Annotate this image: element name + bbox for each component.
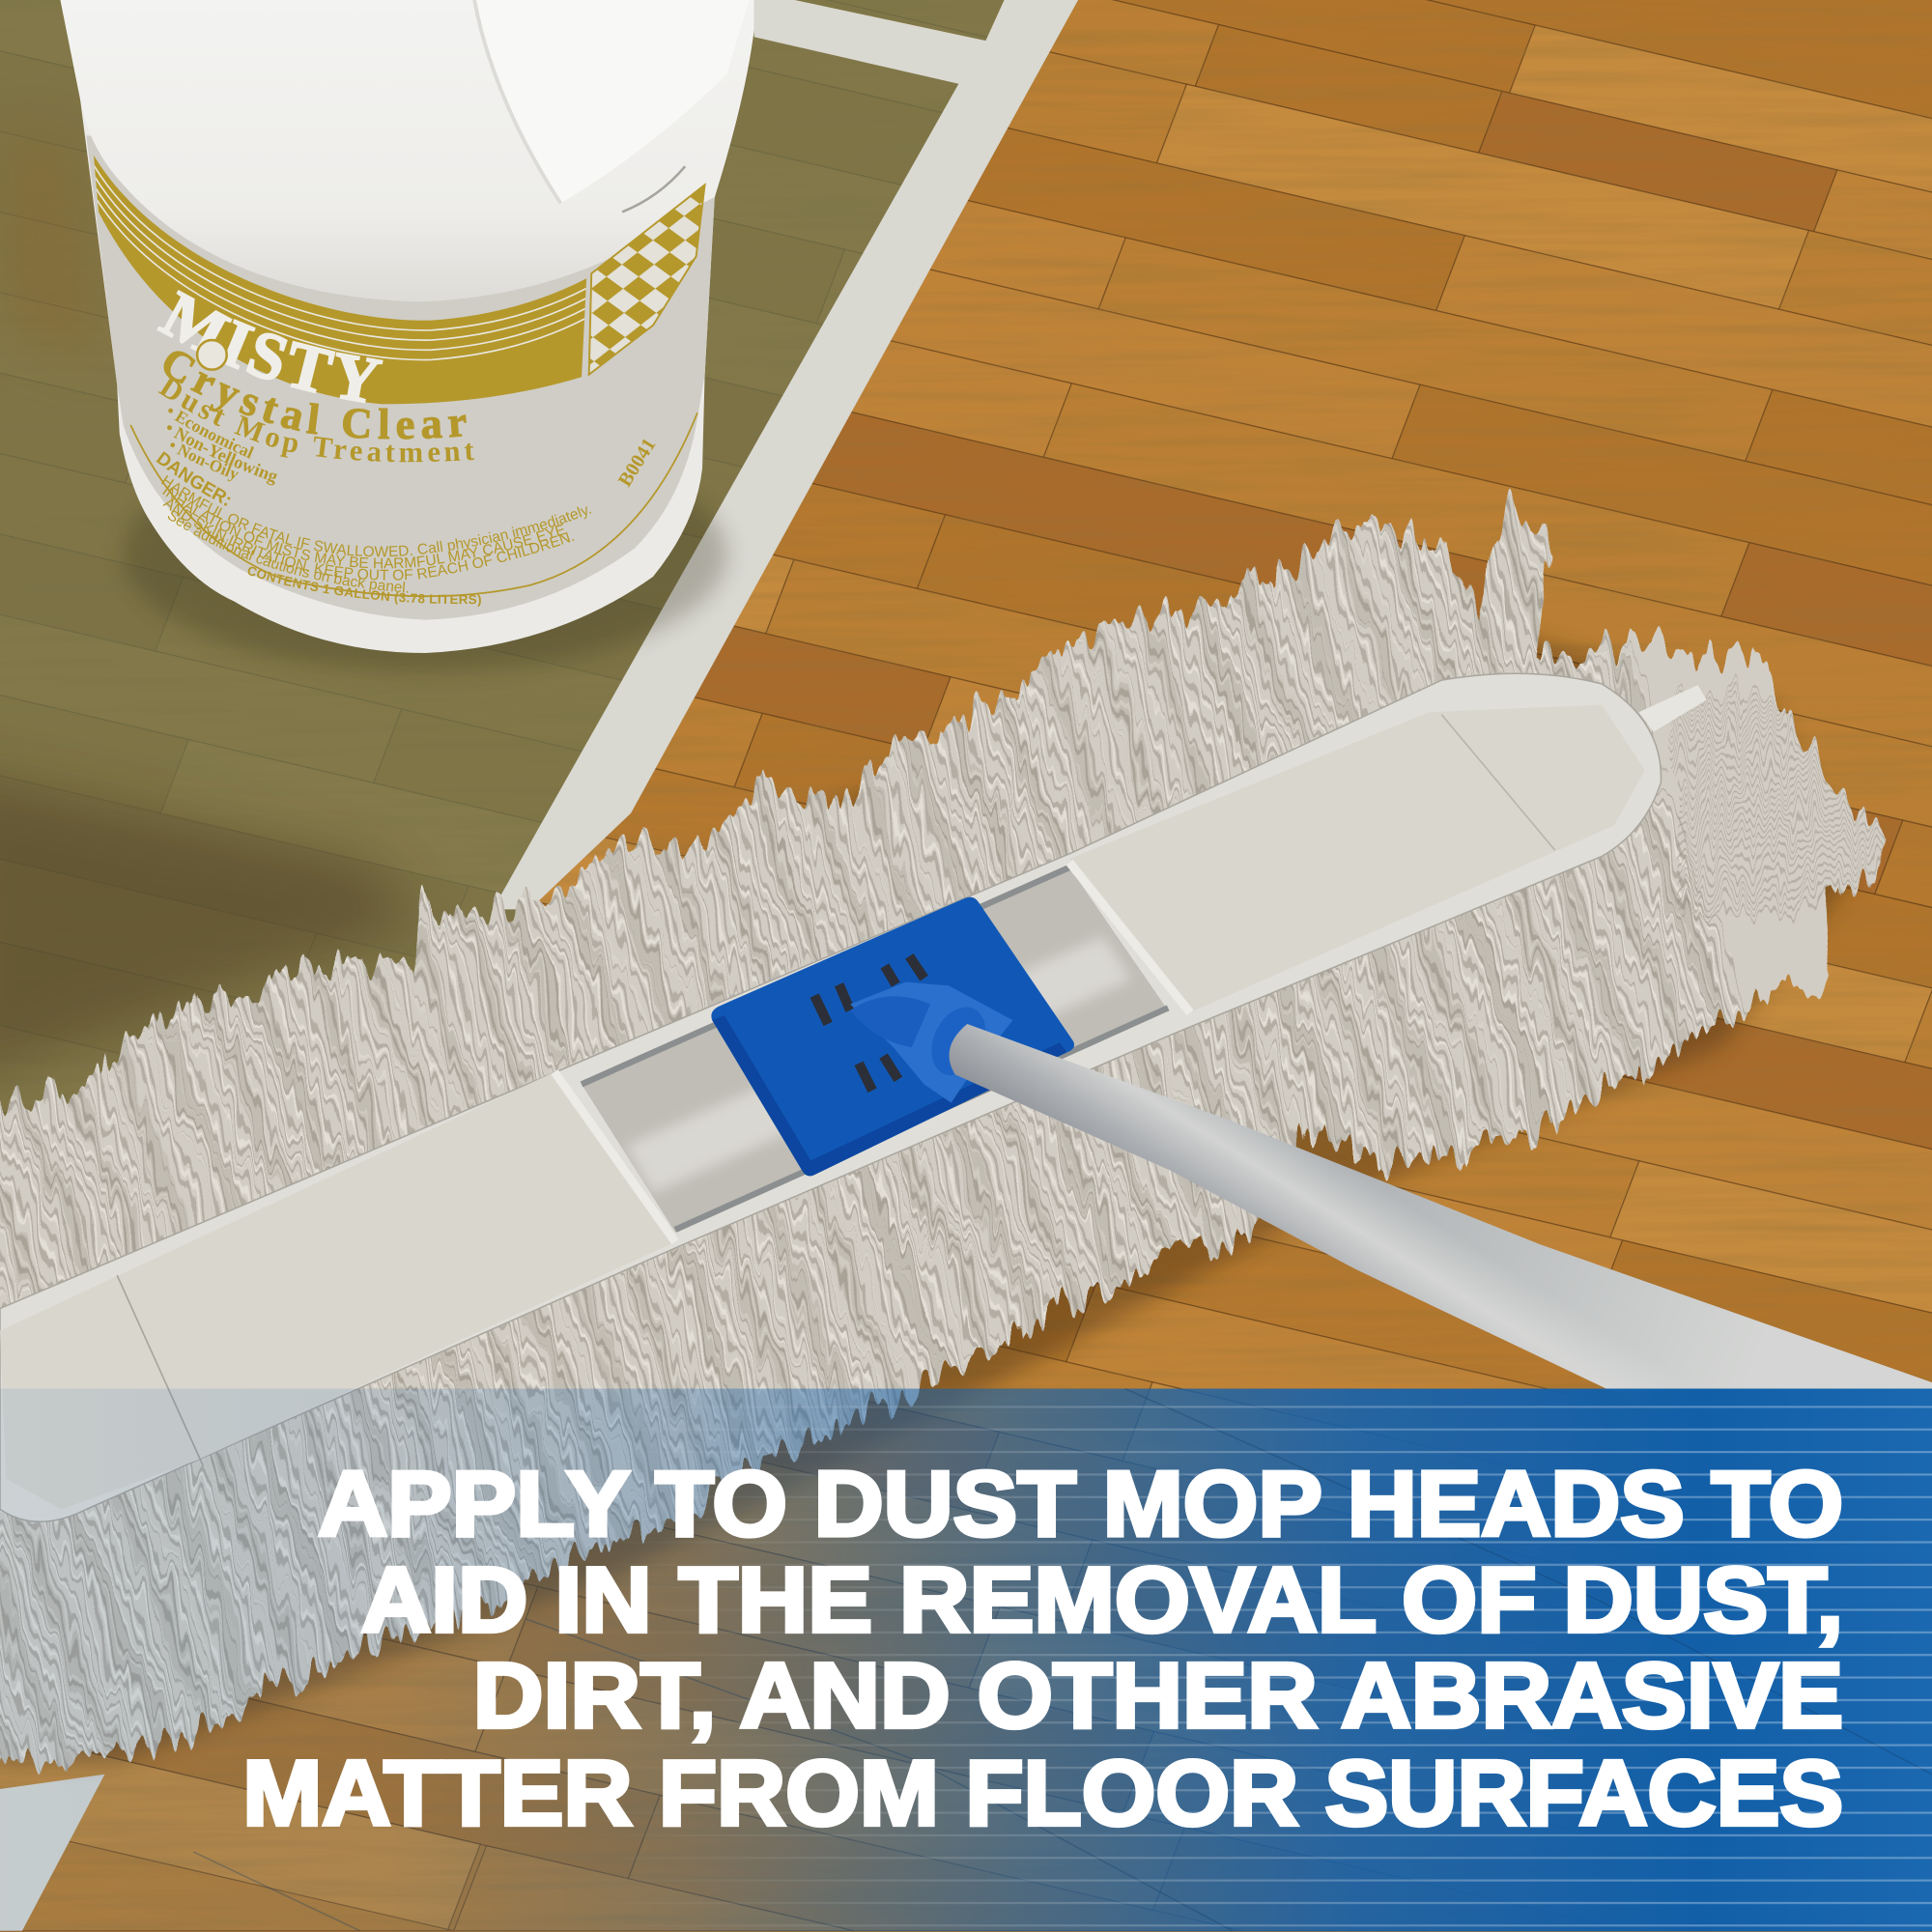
bottle label: gold band — [94, 156, 586, 404]
mop pad: fabric cover — [0, 673, 1707, 1521]
caption heading: APPLY TO DUST MOP HEADS TO — [318, 1452, 1843, 1555]
bottle label: product name and details: AND SKIN IRRITATION. KEEP OUT OF REACH OF CHILDREN. — [160, 495, 577, 584]
bottle label: product name and details: HARMFUL OR FATAL IF SWALLOWED. Call physician immediately. — [158, 472, 594, 560]
exposed center frame — [554, 863, 1190, 1242]
bottle label: product name and details: CONTENTS 1 GALLON (3.78 LITERS) — [245, 563, 482, 607]
left fabric panel — [0, 1072, 675, 1509]
bottle label: product name and details: B0041 — [614, 435, 661, 491]
bottle label: product name and details: Crystal Clear — [164, 351, 467, 440]
bottle label: product name and details — [130, 337, 697, 607]
aluminium mop handle — [950, 1024, 1932, 1392]
bottle label: product name and details: • Economical — [168, 408, 254, 459]
caption heading: AID IN THE REMOVAL OF DUST, — [361, 1548, 1843, 1652]
bottle label: product name and details: Dust Mop Treatment — [158, 377, 474, 462]
bottle label: product name and details: • Non-Yellowing — [167, 425, 278, 485]
bottle: Misty Crystal Clear dust mop treatment — [60, 0, 754, 653]
white court boundary line — [0, 0, 1078, 1931]
bottle label: product name and details: See additional cautions on back panel. — [164, 507, 411, 597]
blue mop plate — [711, 897, 1074, 1176]
bottle label: product name and details: DANGER: — [156, 451, 231, 506]
right fabric panel — [1069, 705, 1645, 1012]
caption heading — [242, 1452, 1843, 1845]
bottle label: product name and details: • Non-Oily — [170, 442, 239, 481]
mop shadow on floor — [0, 591, 1856, 1762]
floor: olive green painted section — [0, 0, 1005, 1182]
bottle shadow — [124, 438, 727, 671]
caption heading: MATTER FROM FLOOR SURFACES — [242, 1742, 1843, 1845]
translucent blue caption band — [0, 1389, 1932, 1931]
bottle label: product name and details: INHALATION OF MISTS MAY BE HARMFUL MAY CAUSE EYE — [159, 483, 568, 572]
plate slots — [814, 956, 924, 1091]
bottle label: checker flag — [589, 185, 705, 375]
caption heading: DIRT, AND OTHER ABRASIVE — [473, 1644, 1843, 1747]
pad end tab — [1638, 685, 1707, 732]
bottle label: MISTY logo: MISTY — [156, 290, 384, 404]
blue swivel connector — [850, 982, 1012, 1103]
mop fringe: cotton yarn strands — [0, 493, 1910, 1799]
